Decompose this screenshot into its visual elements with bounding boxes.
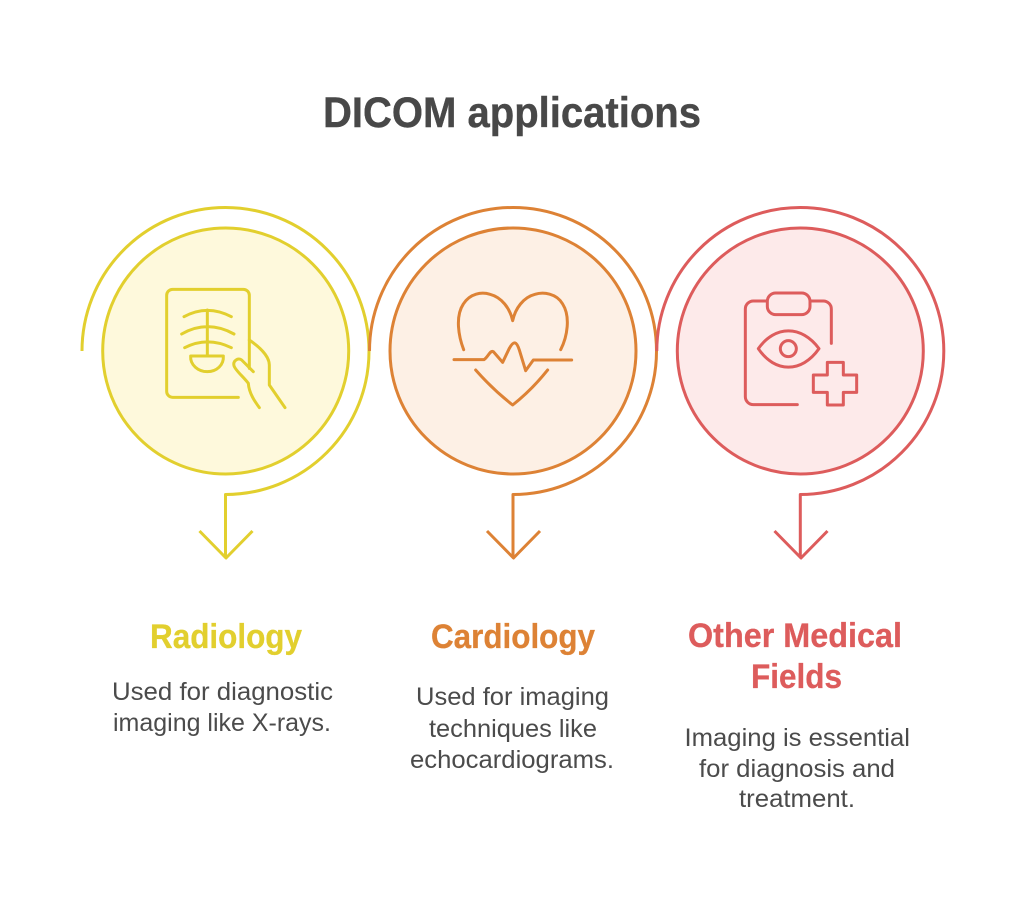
inner circle — [390, 228, 636, 474]
description: radiology: Used for diagnostic — [112, 678, 333, 706]
icon: x-ray held in hand — [167, 289, 285, 408]
heading: radiology: Radiology — [150, 618, 302, 656]
text block: other medical fields — [684, 617, 910, 813]
heading: cardiology: Cardiology — [431, 618, 595, 656]
panel: radiology graphic — [82, 208, 369, 558]
description: other medical fields: Imaging is essential — [684, 724, 910, 752]
text block: radiology — [112, 618, 333, 737]
panel: other medical fields graphic — [657, 207, 944, 558]
title: DICOM applications — [323, 89, 701, 137]
heading: other medical fields: Fields — [751, 658, 842, 696]
description: other medical fields: treatment. — [739, 785, 855, 813]
outer arc with arrow — [657, 207, 944, 558]
description: cardiology: echocardiograms. — [410, 746, 614, 774]
description: cardiology: techniques like — [429, 715, 597, 743]
icon: clipboard with eye and cross — [745, 293, 857, 405]
description: other medical fields: for diagnosis and — [699, 755, 895, 783]
inner circle — [103, 228, 349, 474]
description: radiology: imaging like X-rays. — [113, 709, 331, 737]
outer arc with arrow — [370, 207, 656, 558]
description: other medical fields — [684, 724, 910, 813]
text block: cardiology — [410, 618, 614, 774]
heading: other medical fields — [688, 617, 902, 696]
description: radiology — [112, 678, 333, 737]
icon: heart with pulse — [454, 293, 572, 405]
heading: other medical fields: Other Medical — [688, 617, 902, 655]
description: cardiology — [410, 683, 614, 774]
outer arc with arrow — [82, 208, 369, 558]
inner circle — [677, 228, 923, 474]
description: cardiology: Used for imaging — [416, 683, 609, 711]
panel: cardiology graphic — [370, 207, 656, 558]
